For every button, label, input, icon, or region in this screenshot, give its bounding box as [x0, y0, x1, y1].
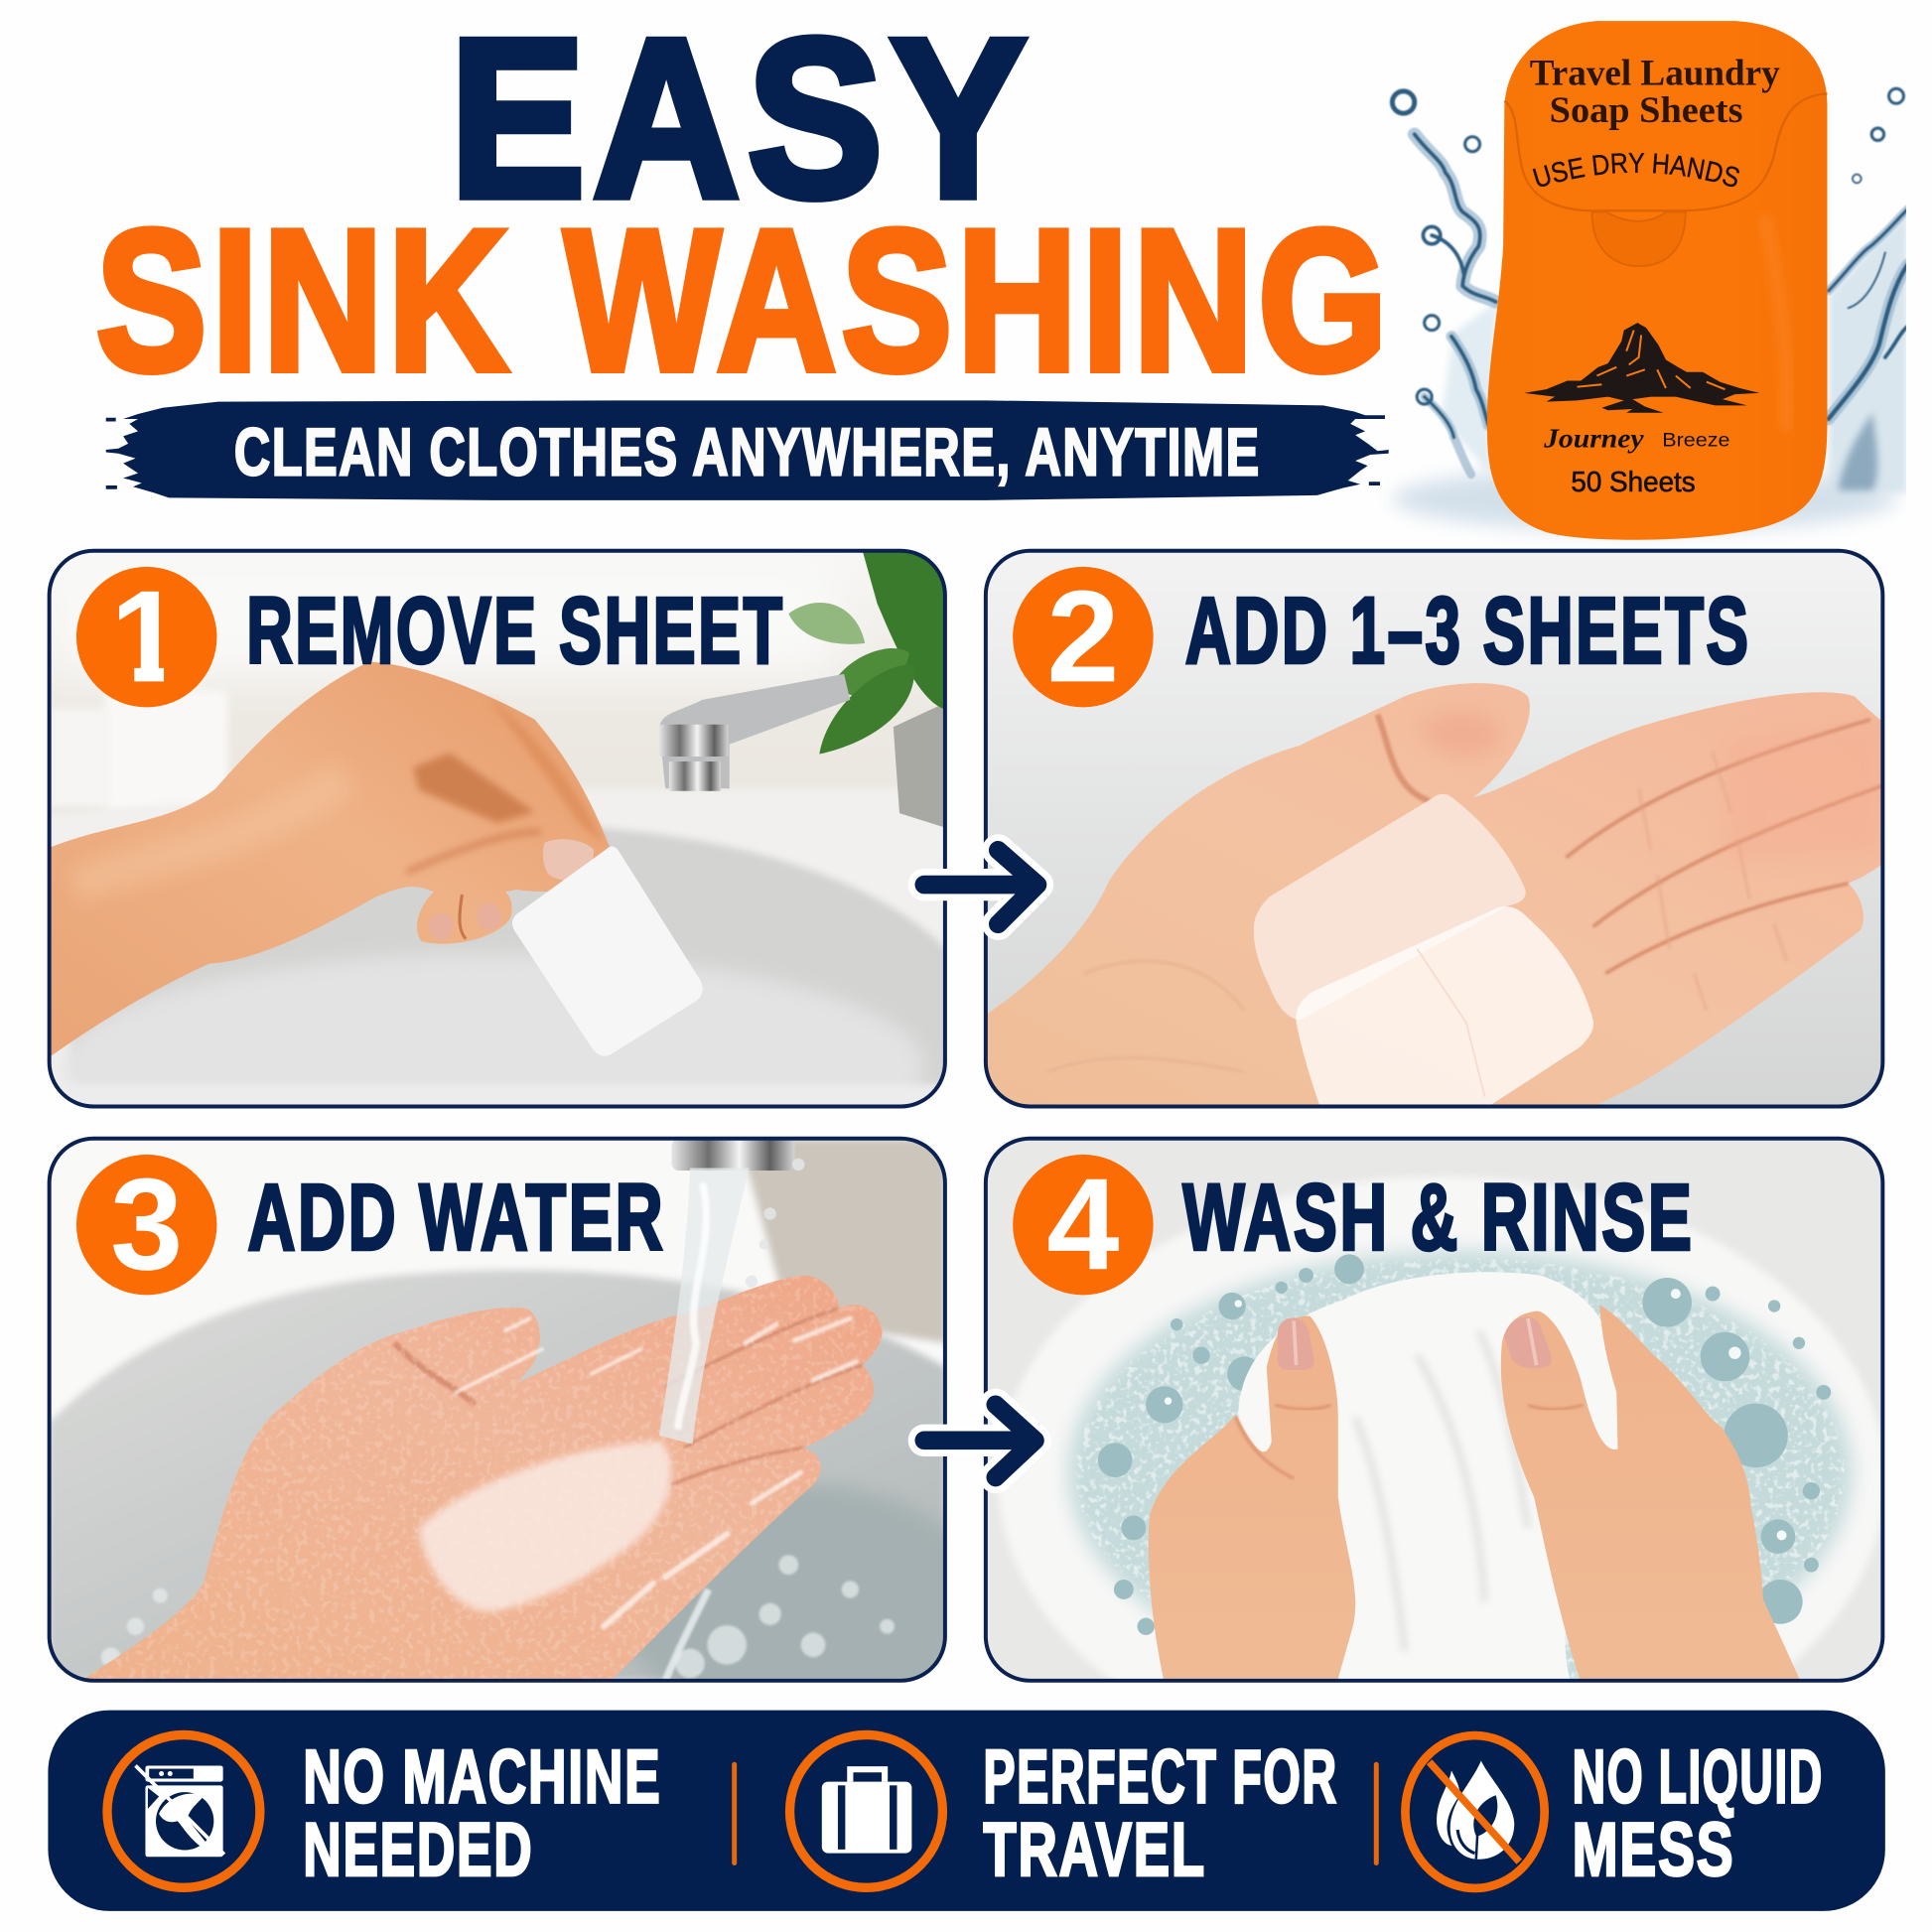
soap sheet — [512, 847, 703, 1056]
arrow: step 3 to step 4 — [924, 1405, 1035, 1477]
panel border — [50, 1139, 945, 1681]
product: orange soap sheet case: Breeze — [1662, 430, 1729, 451]
icon: crossed-out washing machine — [107, 1734, 260, 1887]
panel border — [986, 551, 1882, 1106]
benefit: no machine needed — [107, 1734, 661, 1892]
case label: product name: Travel Laundry — [1530, 53, 1780, 93]
hand — [77, 1276, 883, 1683]
bubbles — [1098, 1254, 1831, 1660]
water bubbles in basin — [101, 1555, 895, 1678]
photo: water running onto hand — [52, 1140, 943, 1679]
case lid — [1504, 93, 1828, 210]
benefit: perfect for travel: TRAVEL — [983, 1808, 1206, 1892]
wet highlights — [456, 1318, 857, 1626]
plant leaves — [788, 551, 946, 755]
photo: hand holding sheet over sink — [52, 552, 943, 1104]
step number 3 — [76, 1151, 216, 1297]
panel: step 4 wash and rinse — [983, 1136, 1884, 1683]
step number 4: 4 — [1046, 1151, 1119, 1297]
soap foam — [419, 1442, 671, 1611]
cloth — [1238, 1272, 1619, 1683]
case body — [1487, 21, 1828, 540]
subtitle brush banner: CLEAN CLOTHES ANYWHERE, ANYTIME — [234, 415, 1261, 489]
benefit: perfect for travel — [790, 1734, 1338, 1892]
product: orange soap sheet case: Soap Sheets — [1550, 89, 1742, 130]
faucet — [659, 674, 850, 788]
case label: brand: Journey — [1543, 424, 1644, 455]
step heading: REMOVE SHEET — [246, 579, 785, 683]
panel: step 3 add water — [48, 1139, 986, 1719]
case side highlight — [1764, 215, 1787, 431]
step number 3: 3 — [110, 1151, 183, 1297]
water stream — [659, 1169, 750, 1445]
arrow: step 1 to step 2 — [924, 850, 1037, 924]
step heading: ADD WATER — [247, 1165, 665, 1269]
step number 2 — [1013, 563, 1154, 709]
subtitle brush banner — [106, 400, 1389, 500]
left hand — [1149, 1315, 1355, 1683]
right hand — [1501, 1305, 1801, 1683]
lid opening notch — [1591, 211, 1686, 266]
benefits bar — [48, 1711, 1885, 1911]
title — [96, 0, 1392, 412]
step heading: WASH & RINSE — [1182, 1165, 1694, 1269]
photo: open hand with sheets — [983, 551, 1887, 1109]
fingernails — [1278, 1317, 1313, 1370]
label: PERFECT FOR — [983, 1735, 1338, 1820]
panel: step 2 add sheets — [983, 551, 1887, 1109]
wet skin sheen — [77, 1276, 883, 1683]
hand — [983, 683, 1887, 1109]
photo: hands washing cloth in soapy bowl — [988, 1140, 1880, 1679]
case label: 50 sheets: 50 Sheets — [1571, 467, 1696, 498]
step number 4 — [1013, 1151, 1154, 1297]
icon: suitcase — [790, 1734, 942, 1887]
icon: crossed-out liquid drop — [1405, 1735, 1545, 1888]
step number 1 — [76, 563, 216, 709]
panel: step 1 remove sheet — [48, 548, 947, 1108]
faucet head — [671, 1139, 794, 1171]
benefit: no liquid mess: MESS — [1573, 1808, 1734, 1892]
panel border — [50, 551, 945, 1106]
title line: SINK WASHING: SINK WASHING — [96, 188, 1392, 412]
case label: use dry hands: USE DRY HANDS — [1533, 153, 1739, 187]
thumbnail — [543, 839, 594, 881]
soapy water — [1068, 1251, 1852, 1694]
benefit: no machine needed: NEEDED — [303, 1808, 533, 1892]
label: NO MACHINE — [303, 1735, 661, 1820]
product: orange soap sheet case — [1487, 21, 1828, 540]
step number 1: 1 — [110, 563, 183, 709]
plant pot — [894, 702, 946, 828]
step number 2: 2 — [1046, 563, 1119, 709]
panel border — [986, 1139, 1882, 1681]
icon: mountain logo — [1524, 323, 1759, 413]
soap sheets — [1254, 794, 1526, 1021]
hand — [50, 661, 610, 1057]
water splash — [1392, 88, 1907, 531]
benefit: no liquid mess — [1405, 1735, 1824, 1892]
